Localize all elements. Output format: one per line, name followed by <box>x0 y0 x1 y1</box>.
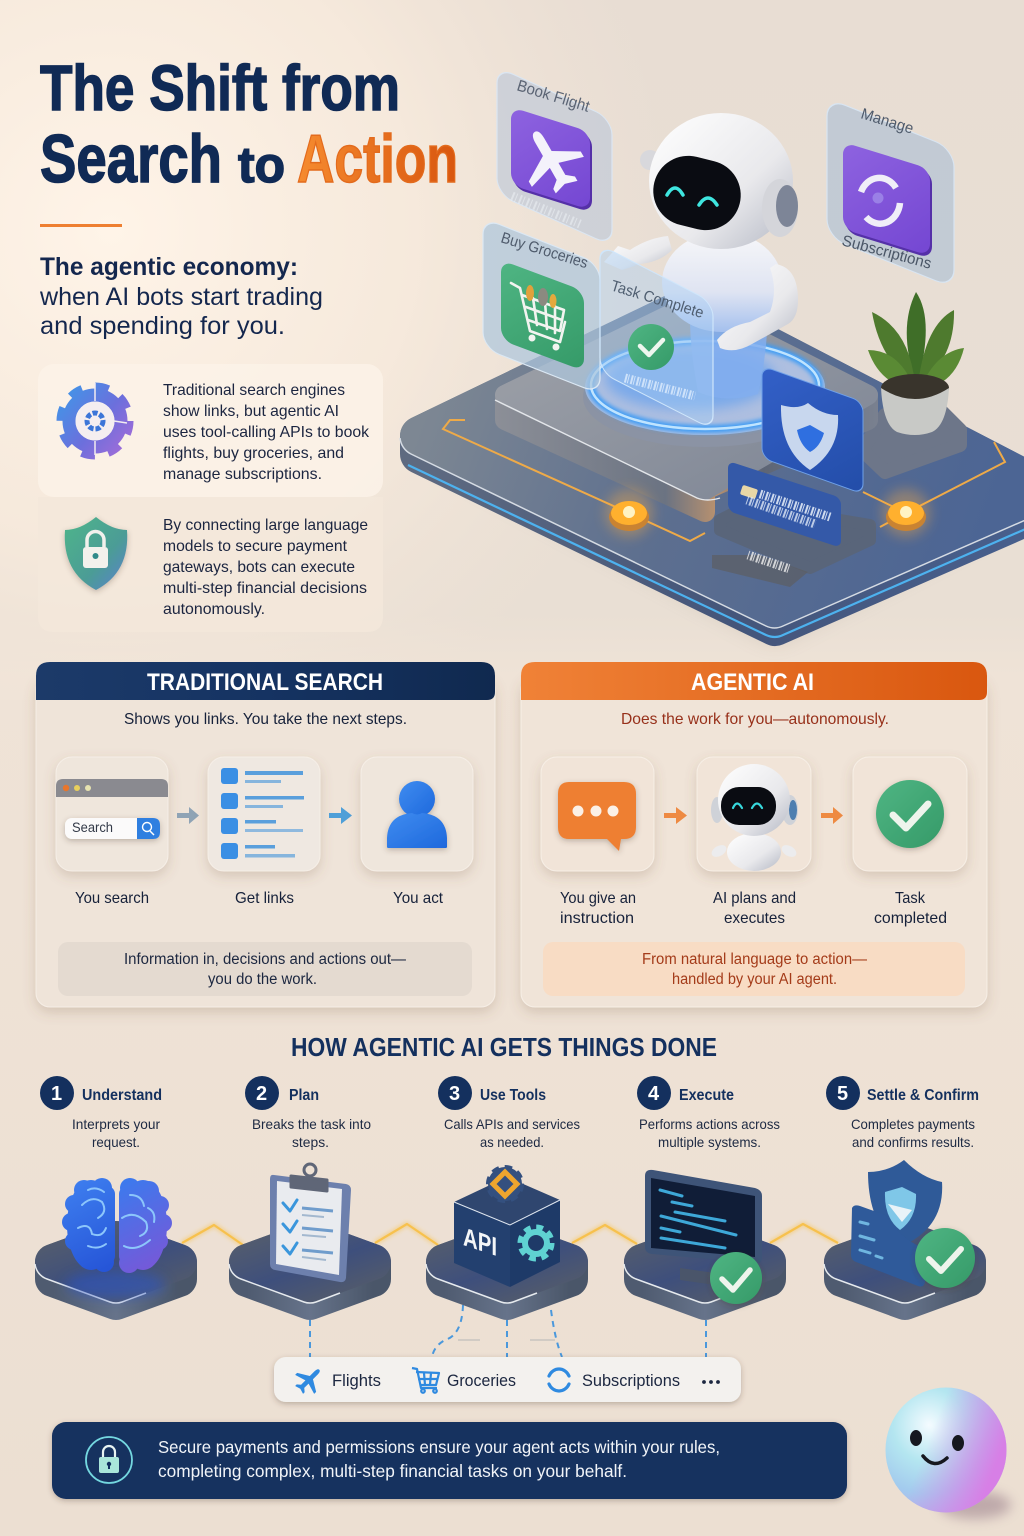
step 5 <box>826 1076 979 1150</box>
arrow <box>821 807 843 824</box>
card reader device <box>712 461 870 587</box>
search box: Search <box>72 820 113 835</box>
panel: agentic AI <box>521 662 987 1007</box>
step 5: Settle & Confirm <box>867 1087 979 1104</box>
step 4: 4 <box>648 1083 660 1105</box>
title: The Shift from <box>40 52 400 124</box>
arrow <box>177 807 199 824</box>
info text 1 <box>163 382 370 483</box>
info text 2: By connecting large language <box>163 517 368 534</box>
step 4: Performs actions across <box>639 1116 780 1132</box>
title <box>40 52 458 197</box>
icon: shield lock <box>65 517 127 590</box>
title: Action <box>297 121 458 197</box>
step 3: as needed. <box>480 1134 544 1150</box>
icon: shield <box>868 1160 942 1247</box>
icon: gear <box>62 383 128 455</box>
glass card: Book Flight <box>497 67 612 246</box>
icon: sync <box>549 1369 569 1391</box>
gold node left <box>605 489 653 537</box>
gold node right <box>882 489 930 537</box>
glass card: Manage Subscriptions <box>827 98 954 288</box>
icon: API cube <box>454 1167 560 1287</box>
step 3: Use Tools <box>480 1087 546 1104</box>
step 5: and confirms results. <box>852 1134 974 1150</box>
agentic note: From natural language to action— <box>642 951 867 968</box>
agentic step labels: instruction <box>560 910 634 927</box>
green check badge <box>710 1252 762 1304</box>
agentic note: handled by your AI agent. <box>672 971 837 988</box>
tools chip bar: Flights <box>332 1372 381 1390</box>
security banner <box>52 1422 847 1499</box>
chat bubble icon <box>558 782 636 851</box>
step 3 platform and API cube <box>426 1167 570 1303</box>
subtitle: and spending for you. <box>40 312 285 340</box>
robot head <box>640 113 798 249</box>
info panel <box>38 364 383 632</box>
plant in pot <box>868 292 964 435</box>
step 1: Understand <box>82 1087 162 1104</box>
more dots <box>702 1380 720 1384</box>
step tile: you act <box>361 757 473 871</box>
glass card: Book Flight: Book Flight <box>515 78 592 116</box>
arrow <box>329 807 352 824</box>
step tile: AI plans <box>697 757 811 871</box>
panel: traditional search <box>36 662 495 1007</box>
blue dashed links <box>310 1305 706 1357</box>
icon: plane <box>290 1360 329 1399</box>
glass card: Buy Groceries: Buy Groceries <box>499 230 590 272</box>
step 4: multiple systems. <box>658 1134 761 1150</box>
purple flight icon <box>509 107 593 213</box>
info text 1: Traditional search engines <box>163 382 345 399</box>
glass card: Manage Subscriptions: Subscriptions <box>840 232 933 273</box>
orb face <box>910 1430 964 1464</box>
info text 2: autonomously. <box>163 601 265 618</box>
traditional note: you do the work. <box>208 971 317 988</box>
agentic step labels: Task <box>895 890 926 907</box>
subtitle <box>39 253 323 340</box>
robot visor <box>646 148 748 238</box>
step 5: 5 <box>837 1083 848 1105</box>
icon: lock <box>86 1437 132 1483</box>
tools chip bar: Groceries <box>447 1372 516 1390</box>
step 2: 2 <box>256 1083 267 1105</box>
step 1 platform and brain <box>35 1178 179 1303</box>
agentic header <box>521 662 987 700</box>
traditional header: TRADITIONAL SEARCH <box>147 669 383 696</box>
banner text: completing complex, multi-step financial tasks on your behalf. <box>158 1461 627 1481</box>
blue shield card <box>762 366 863 494</box>
info text 2: gateways, bots can execute <box>163 559 355 576</box>
step 5: Completes payments <box>851 1116 975 1132</box>
step 3 <box>438 1076 580 1150</box>
smiling orb mascot <box>886 1388 1011 1519</box>
traditional header <box>36 662 495 700</box>
step 2 <box>245 1076 371 1150</box>
glass card: Manage Subscriptions: Manage <box>859 106 915 138</box>
hero illustration: robot on isometric platform <box>400 67 1024 640</box>
info text 1: show links, but agentic AI <box>163 403 339 420</box>
section heading: HOW AGENTIC AI GETS THINGS DONE <box>291 1032 717 1062</box>
traditional note: Information in, decisions and actions out— <box>124 951 406 968</box>
info text 2: models to secure payment <box>163 538 348 555</box>
receipt <box>712 555 808 587</box>
cyan gear <box>521 1228 551 1258</box>
gold circuit lines <box>443 420 1005 541</box>
robot right arm <box>717 264 798 350</box>
traditional step labels: Get links <box>235 890 294 907</box>
robot ear <box>762 179 798 237</box>
agentic step labels <box>560 890 947 927</box>
step 1: Interprets your <box>72 1116 160 1132</box>
info text 2: multi-step financial decisions <box>163 580 367 597</box>
arrow <box>664 807 687 824</box>
agentic tagline: Does the work for you—autonomously. <box>621 711 889 728</box>
info card: secure payments <box>38 497 383 632</box>
step 3: 3 <box>449 1083 460 1105</box>
orange gear <box>488 1167 522 1201</box>
step 2: Breaks the task into <box>252 1116 371 1132</box>
payment card <box>728 461 841 548</box>
green cart icon <box>501 260 584 371</box>
info text 1: uses tool-calling APIs to book <box>163 424 370 441</box>
glass card: Task Complete: Task Complete <box>609 278 706 322</box>
step 2: steps. <box>292 1134 329 1150</box>
robot <box>604 113 798 399</box>
garbled caption <box>625 378 695 396</box>
person icon <box>387 781 447 848</box>
glass card: Task Complete <box>600 245 713 430</box>
info text 2 <box>163 517 368 618</box>
step 1: request. <box>92 1134 140 1150</box>
step tile: you search <box>56 757 168 871</box>
icon: cart <box>412 1368 439 1393</box>
step tile: instruction <box>541 757 654 871</box>
traditional step labels <box>75 890 444 907</box>
small robot icon <box>710 764 798 871</box>
info card: tool-calling <box>38 364 383 497</box>
tools chip bar: Subscriptions <box>582 1372 680 1390</box>
traditional step labels: You search <box>75 890 149 907</box>
step 4 <box>637 1076 780 1150</box>
step headers <box>40 1076 979 1150</box>
agentic step labels: AI plans and <box>713 890 796 907</box>
gold connectors <box>182 1224 838 1245</box>
title: Search <box>40 121 222 197</box>
robot eyes <box>667 188 717 205</box>
step 2 platform and clipboard <box>229 1164 373 1303</box>
tools chip bar <box>274 1357 741 1402</box>
agentic step labels: You give an <box>560 890 636 907</box>
green check <box>628 324 674 370</box>
banner text <box>158 1437 720 1481</box>
robot left arm <box>604 236 672 270</box>
green check badge <box>915 1228 975 1288</box>
icon: monitor <box>645 1170 762 1286</box>
agentic note <box>543 942 965 996</box>
traditional tagline: Shows you links. You take the next steps. <box>124 711 407 728</box>
icon: clipboard <box>270 1164 351 1282</box>
step 2: Plan <box>289 1087 319 1104</box>
step 1: 1 <box>51 1083 62 1105</box>
step tile: get links <box>208 757 320 871</box>
robot lower body <box>690 318 768 399</box>
robot torso <box>662 232 782 332</box>
icon: brain <box>62 1178 172 1273</box>
agentic header: AGENTIC AI <box>691 669 814 696</box>
step 4 platform and monitor <box>624 1170 768 1304</box>
traditional note <box>58 942 472 996</box>
subtitle: The agentic economy: <box>40 253 298 281</box>
orange divider <box>40 224 122 227</box>
step tile: task completed <box>853 757 967 871</box>
agentic step labels: completed <box>874 910 947 927</box>
title: to <box>238 137 285 193</box>
stage tier <box>495 305 868 512</box>
step 5 platform, shield and card <box>824 1160 975 1303</box>
glowing ring pedestal <box>583 339 827 447</box>
plant pad <box>862 400 960 472</box>
base platform <box>400 306 1024 640</box>
garbled caption <box>512 196 580 224</box>
step 1 <box>40 1076 162 1150</box>
step 3: Calls APIs and services <box>444 1116 580 1132</box>
icon: card block <box>851 1205 925 1286</box>
purple sync icon <box>843 142 932 259</box>
banner text: Secure payments and permissions ensure your agent acts within your rules, <box>158 1437 720 1457</box>
shield icon <box>781 403 838 470</box>
step 4: Execute <box>679 1087 734 1104</box>
info text 1: manage subscriptions. <box>163 466 322 483</box>
info text 1: flights, buy groceries, and <box>163 445 344 462</box>
agentic step labels: executes <box>724 910 785 927</box>
green check icon <box>876 780 944 848</box>
icon: API cube: API <box>463 1222 497 1262</box>
traditional step labels: You act <box>393 890 444 907</box>
robot shoulder joint <box>757 256 779 292</box>
glass card: Buy Groceries <box>483 218 600 394</box>
subtitle: when AI bots start trading <box>39 283 323 311</box>
